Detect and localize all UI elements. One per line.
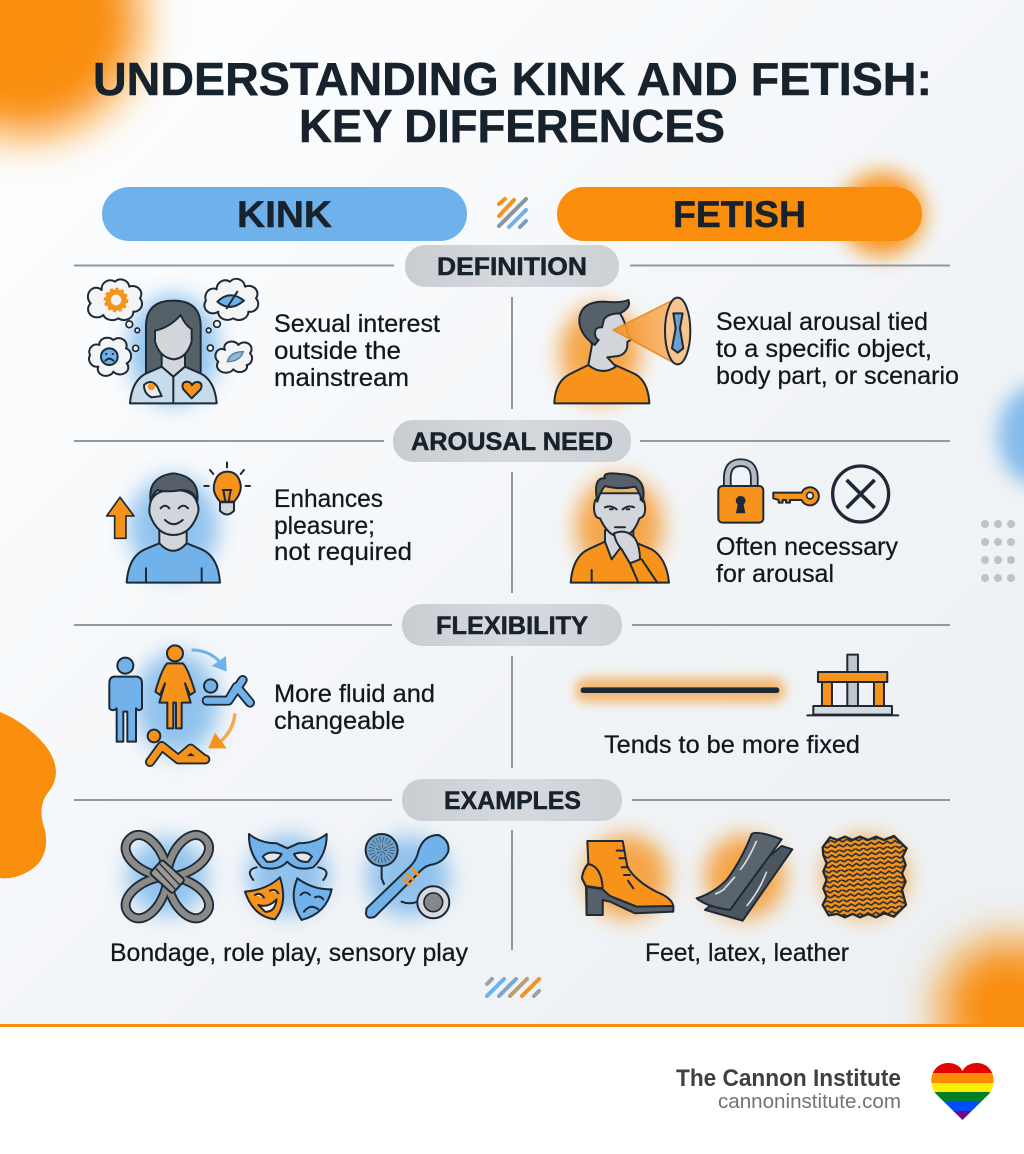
footer brand text: The Cannon Institute (676, 1065, 901, 1092)
footer band (0, 1024, 1024, 1154)
orange blur top left (0, 0, 140, 135)
icon: fixed line with glow (575, 677, 785, 703)
orange blob left (0, 712, 56, 878)
text: fetish arousal need: for arousal (716, 560, 834, 588)
icon: boot (582, 835, 673, 918)
text: kink definition (274, 310, 440, 392)
icon: thinking man (571, 473, 669, 583)
icon: leather mesh (823, 836, 907, 917)
text: kink definition: mainstream (274, 364, 409, 392)
text: fetish definition: to a specific object, (716, 335, 932, 363)
text: kink arousal need: pleasure; (274, 512, 375, 540)
orange blur bottom right (940, 940, 1024, 1076)
text: kink definition: Sexual interest (274, 310, 440, 338)
text: fetish definition (716, 308, 959, 390)
header: kink (102, 187, 467, 241)
text: kink flexibility: More fluid and (274, 680, 435, 708)
header: fetish (557, 187, 922, 241)
text: fetish flexibility: Tends to be more fixed (604, 731, 860, 759)
text: kink arousal need: Enhances (274, 485, 383, 513)
text: fetish arousal need (716, 533, 898, 588)
icon: man looking at object through cone (554, 298, 690, 403)
icon: latex sheet (697, 833, 792, 921)
text: fetish arousal need: Often necessary (716, 533, 898, 561)
section label: examples: EXAMPLES (444, 787, 581, 815)
fetish pill glow (840, 172, 924, 256)
text: kink flexibility (274, 680, 435, 735)
footer brand text: cannoninstitute.com (718, 1091, 901, 1113)
header: fetish: FETISH (673, 194, 806, 235)
icon: masks (245, 834, 332, 920)
text: fetish examples: Feet, latex, leather (645, 939, 849, 967)
title: UNDERSTANDING KINK AND FETISH: (93, 53, 932, 105)
blue blur right (998, 385, 1024, 485)
icon: rainbow heart (931, 1063, 994, 1120)
section label: flexibility (402, 604, 622, 646)
section label: definition: DEFINITION (437, 253, 587, 281)
icon: rope (119, 829, 215, 925)
icon: woman with thought clouds (88, 279, 258, 405)
text: fetish definition: Sexual arousal tied (716, 308, 928, 336)
section label: arousal need: AROUSAL NEED (411, 428, 613, 456)
icon: smiling man with arrow and bulb (107, 462, 250, 583)
text: kink flexibility: changeable (274, 707, 405, 735)
title: KEY DIFFERENCES (299, 100, 725, 152)
text: kink examples: Bondage, role play, sensory play (110, 939, 468, 967)
section label: flexibility: FLEXIBILITY (436, 612, 588, 640)
icon: lock, key and cross (718, 463, 889, 523)
title (93, 53, 932, 152)
section label: definition (405, 245, 619, 287)
text: kink arousal need: not required (274, 538, 412, 566)
icon: fixed structure (807, 655, 898, 715)
text: kink definition: outside the (274, 337, 401, 365)
section label: arousal need (393, 420, 631, 462)
icon: sensory tools (366, 834, 450, 918)
footer brand text (676, 1065, 901, 1113)
text: kink arousal need (274, 485, 412, 566)
section label: examples (402, 779, 622, 821)
header: kink: KINK (237, 194, 332, 235)
icon: figures changing positions (109, 645, 250, 762)
text: fetish definition: body part, or scenario (716, 362, 959, 390)
